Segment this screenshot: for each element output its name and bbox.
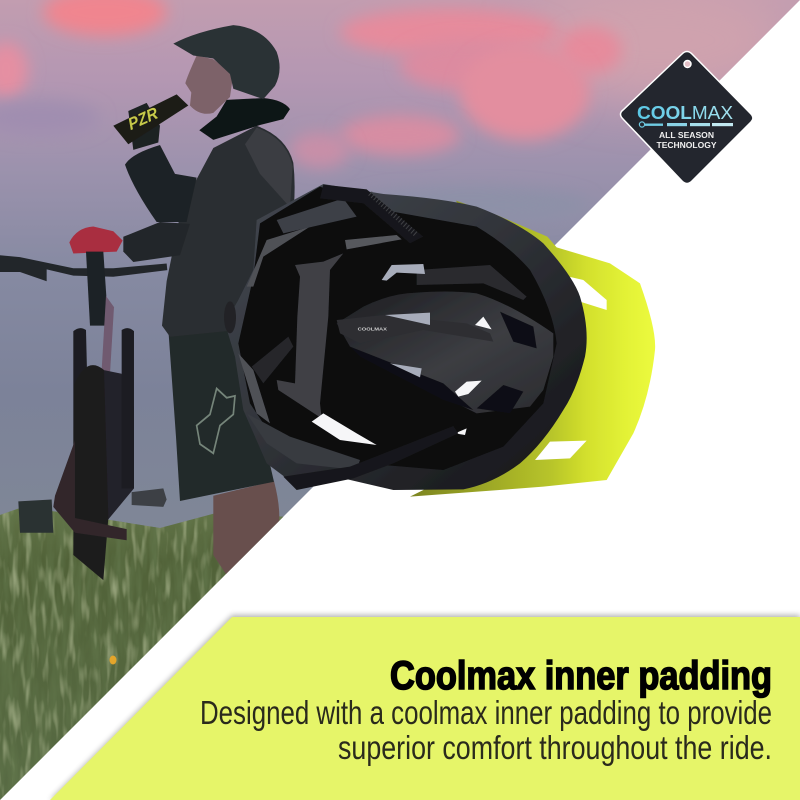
jacket <box>162 126 295 337</box>
grass shadow texture <box>0 510 282 800</box>
grass base <box>0 508 284 800</box>
visor upper vent <box>566 276 607 310</box>
red glove <box>69 226 123 253</box>
tag shape <box>620 52 753 184</box>
collar <box>199 98 290 140</box>
thermometer bars <box>639 122 733 127</box>
bottle label: PZR <box>126 104 161 134</box>
face <box>185 56 233 114</box>
drinking hand <box>128 103 160 150</box>
grey tab <box>345 235 402 249</box>
tag hole <box>684 60 691 68</box>
panel shape <box>50 617 800 800</box>
rear cradle left grey <box>238 227 310 423</box>
grass meadow <box>0 508 284 800</box>
patterned band top <box>277 198 357 233</box>
patterned band bottom <box>247 413 360 470</box>
bike rear mass <box>103 370 134 525</box>
grass light texture <box>0 510 281 797</box>
fox logo on shorts <box>197 388 235 453</box>
dial <box>224 301 236 333</box>
left strap <box>252 337 293 383</box>
fork legs <box>73 328 134 488</box>
leg <box>213 481 279 580</box>
coolmax wordmark: COOLMAX <box>637 102 733 123</box>
water bottle <box>113 94 188 144</box>
main padding ribs <box>337 291 553 413</box>
vent openings <box>382 264 430 377</box>
tyre <box>73 365 108 580</box>
coolmax tag badge <box>620 52 753 184</box>
inner black padding <box>238 187 557 470</box>
flower <box>110 656 116 664</box>
yellow visor <box>410 201 655 497</box>
sky <box>0 0 800 560</box>
raised arm <box>125 145 197 222</box>
dark groove <box>350 347 473 410</box>
vertical grey pad <box>277 253 343 418</box>
outer shell <box>225 184 587 490</box>
pedal left <box>18 500 53 533</box>
shoulder highlight <box>245 128 293 207</box>
forearm on bar <box>123 222 178 262</box>
handlebar <box>0 255 167 281</box>
all season text: ALL SEASON <box>659 130 714 140</box>
upper chin strap <box>320 185 423 243</box>
technology text: TECHNOLOGY <box>656 140 717 150</box>
drivetrain <box>53 440 127 540</box>
pink clouds <box>0 0 790 223</box>
bright vent openings <box>312 317 492 445</box>
coolmax mark on pad: COOLMAX <box>358 327 388 333</box>
lower chin strap <box>283 426 458 490</box>
mesh cells <box>477 312 537 413</box>
upper rib <box>417 265 527 300</box>
coolmax pad slit <box>337 315 493 343</box>
helmet, underside view <box>224 184 655 497</box>
panel shadow <box>50 615 800 800</box>
pink frame <box>102 296 114 374</box>
shorts <box>168 326 274 501</box>
strap ribs <box>370 193 417 235</box>
rider helmet <box>173 25 280 99</box>
yellow caption panel <box>50 617 800 800</box>
rider figure <box>0 25 295 580</box>
visor lower vent <box>535 441 587 460</box>
stem and head tube <box>86 252 108 326</box>
pedal right <box>132 488 167 507</box>
